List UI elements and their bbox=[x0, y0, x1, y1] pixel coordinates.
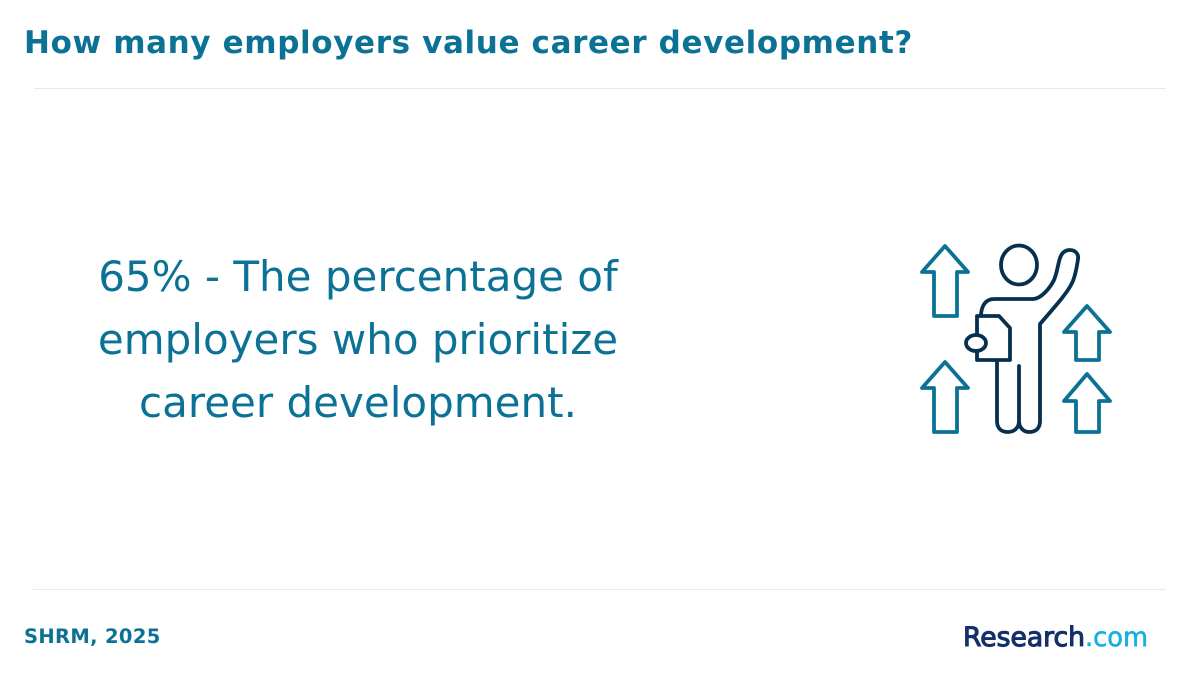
main statistic text bbox=[98, 252, 619, 427]
logo: Research.com: .com bbox=[1085, 622, 1148, 653]
title: How many employers value career development? bbox=[24, 25, 913, 61]
icon: person with document and up arrows bbox=[920, 244, 1112, 434]
icon: person bbox=[966, 246, 1078, 432]
logo: Research.com: Research bbox=[963, 622, 1085, 653]
main statistic text: 65% - The percentage of bbox=[98, 252, 618, 301]
logo: Research.com bbox=[963, 622, 1148, 653]
source label: SHRM, 2025 bbox=[24, 625, 161, 648]
main statistic text: career development. bbox=[139, 378, 577, 427]
icon: up arrows bbox=[922, 246, 1110, 432]
main statistic text: employers who prioritize bbox=[98, 315, 618, 364]
